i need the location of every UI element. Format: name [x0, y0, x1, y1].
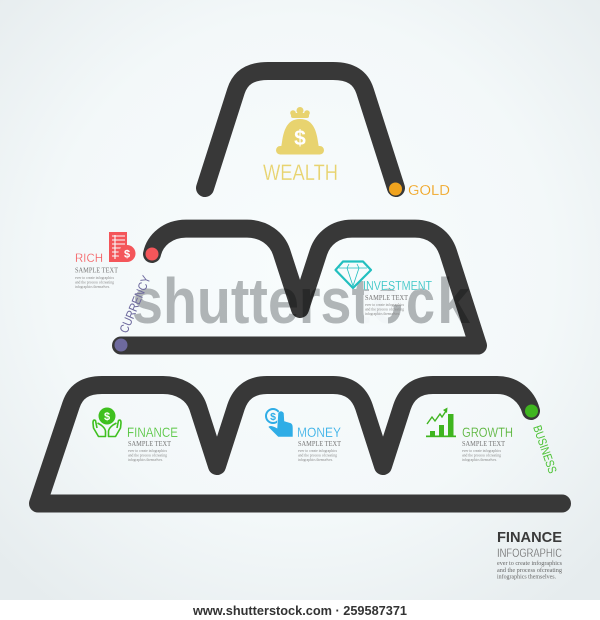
text block: finance infographic: FINANCE: [497, 529, 562, 546]
text block: finance: [127, 424, 178, 462]
icon: money bag: [276, 107, 324, 154]
text block: rich: and the process ofcreating: [75, 280, 114, 284]
text block: finance infographic: ever to create infographics: [497, 560, 563, 567]
label: business: BUSINESS: [530, 423, 560, 475]
label: wealth: WEALTH: [263, 160, 338, 185]
endpoint: business: [525, 404, 538, 418]
text block: money: SAMPLE TEXT: [298, 439, 341, 448]
watermark: o: [372, 265, 403, 337]
text block: investment: and the process ofcreating: [365, 308, 404, 312]
middle bars outline: [121, 229, 478, 346]
icon: diamond: [336, 262, 371, 288]
text block: growth: GROWTH: [462, 424, 513, 440]
endpoint: gold: [389, 182, 402, 196]
text block: investment: SAMPLE TEXT: [365, 293, 408, 302]
text backing over watermark: [364, 291, 405, 325]
top bar outline: wealth: [205, 71, 396, 188]
watermark: k: [437, 265, 470, 337]
text block: growth: and the process ofcreating: [462, 454, 501, 458]
text block: rich: infographics themselves.: [75, 285, 110, 289]
text block: investment: [363, 278, 432, 316]
text block: finance infographic: infographics themselves.: [497, 574, 557, 580]
icon: hand and coin: [266, 409, 293, 437]
text block: growth: [462, 424, 513, 462]
label: gold: GOLD: [408, 182, 450, 199]
text block: money: infographics themselves.: [298, 458, 333, 462]
icon: rich document with coin: $: [124, 248, 130, 260]
text block: rich: ever to create infographics: [75, 276, 115, 280]
text block: rich: RICH: [75, 253, 103, 265]
watermark: shutterst: [132, 265, 370, 337]
text block: money: ever to create infographics: [298, 449, 338, 453]
text block: money: and the process ofcreating: [298, 454, 337, 458]
text block: finance: infographics themselves.: [128, 458, 163, 462]
text block: investment: ever to create infographics: [365, 303, 405, 307]
text block: finance infographic: and the process ofcreating: [497, 567, 562, 574]
text block: finance: SAMPLE TEXT: [128, 439, 171, 448]
endpoint: currency: [114, 338, 128, 352]
icon: hands with coin: $: [104, 411, 110, 423]
endpoint: rich: [146, 248, 158, 260]
text block: money: [297, 424, 342, 462]
text block: growth: infographics themselves.: [462, 458, 497, 462]
bottom bars outline: [38, 385, 562, 504]
text block: growth: ever to create infographics: [462, 449, 502, 453]
label: currency: CURRENCY: [117, 273, 154, 335]
text block: finance infographic: INFOGRAPHIC: [497, 546, 562, 560]
text block: finance: FINANCE: [127, 424, 178, 440]
icon: rich document with coin: [109, 232, 136, 262]
icon: hand and coin: $: [270, 411, 276, 423]
text block: finance: and the process ofcreating: [128, 454, 167, 458]
text block: money: MONEY: [297, 424, 342, 440]
text block: investment: infographics themselves.: [365, 312, 400, 316]
icon: hands with coin: [93, 408, 121, 436]
text block: investment: INVESTMENT: [363, 278, 432, 293]
watermark: c: [406, 265, 435, 337]
text block: rich: [75, 253, 118, 289]
text block: rich: SAMPLE TEXT: [75, 266, 118, 274]
text block: growth: SAMPLE TEXT: [462, 439, 505, 448]
footer strip: [0, 600, 600, 620]
text block: finance: ever to create infographics: [128, 449, 168, 453]
icon: growth chart: [426, 408, 456, 437]
text block: finance infographic: [497, 529, 563, 580]
footer text: www.shutterstock.com · 259587371: [192, 604, 407, 618]
icon: money bag: $: [294, 127, 306, 150]
